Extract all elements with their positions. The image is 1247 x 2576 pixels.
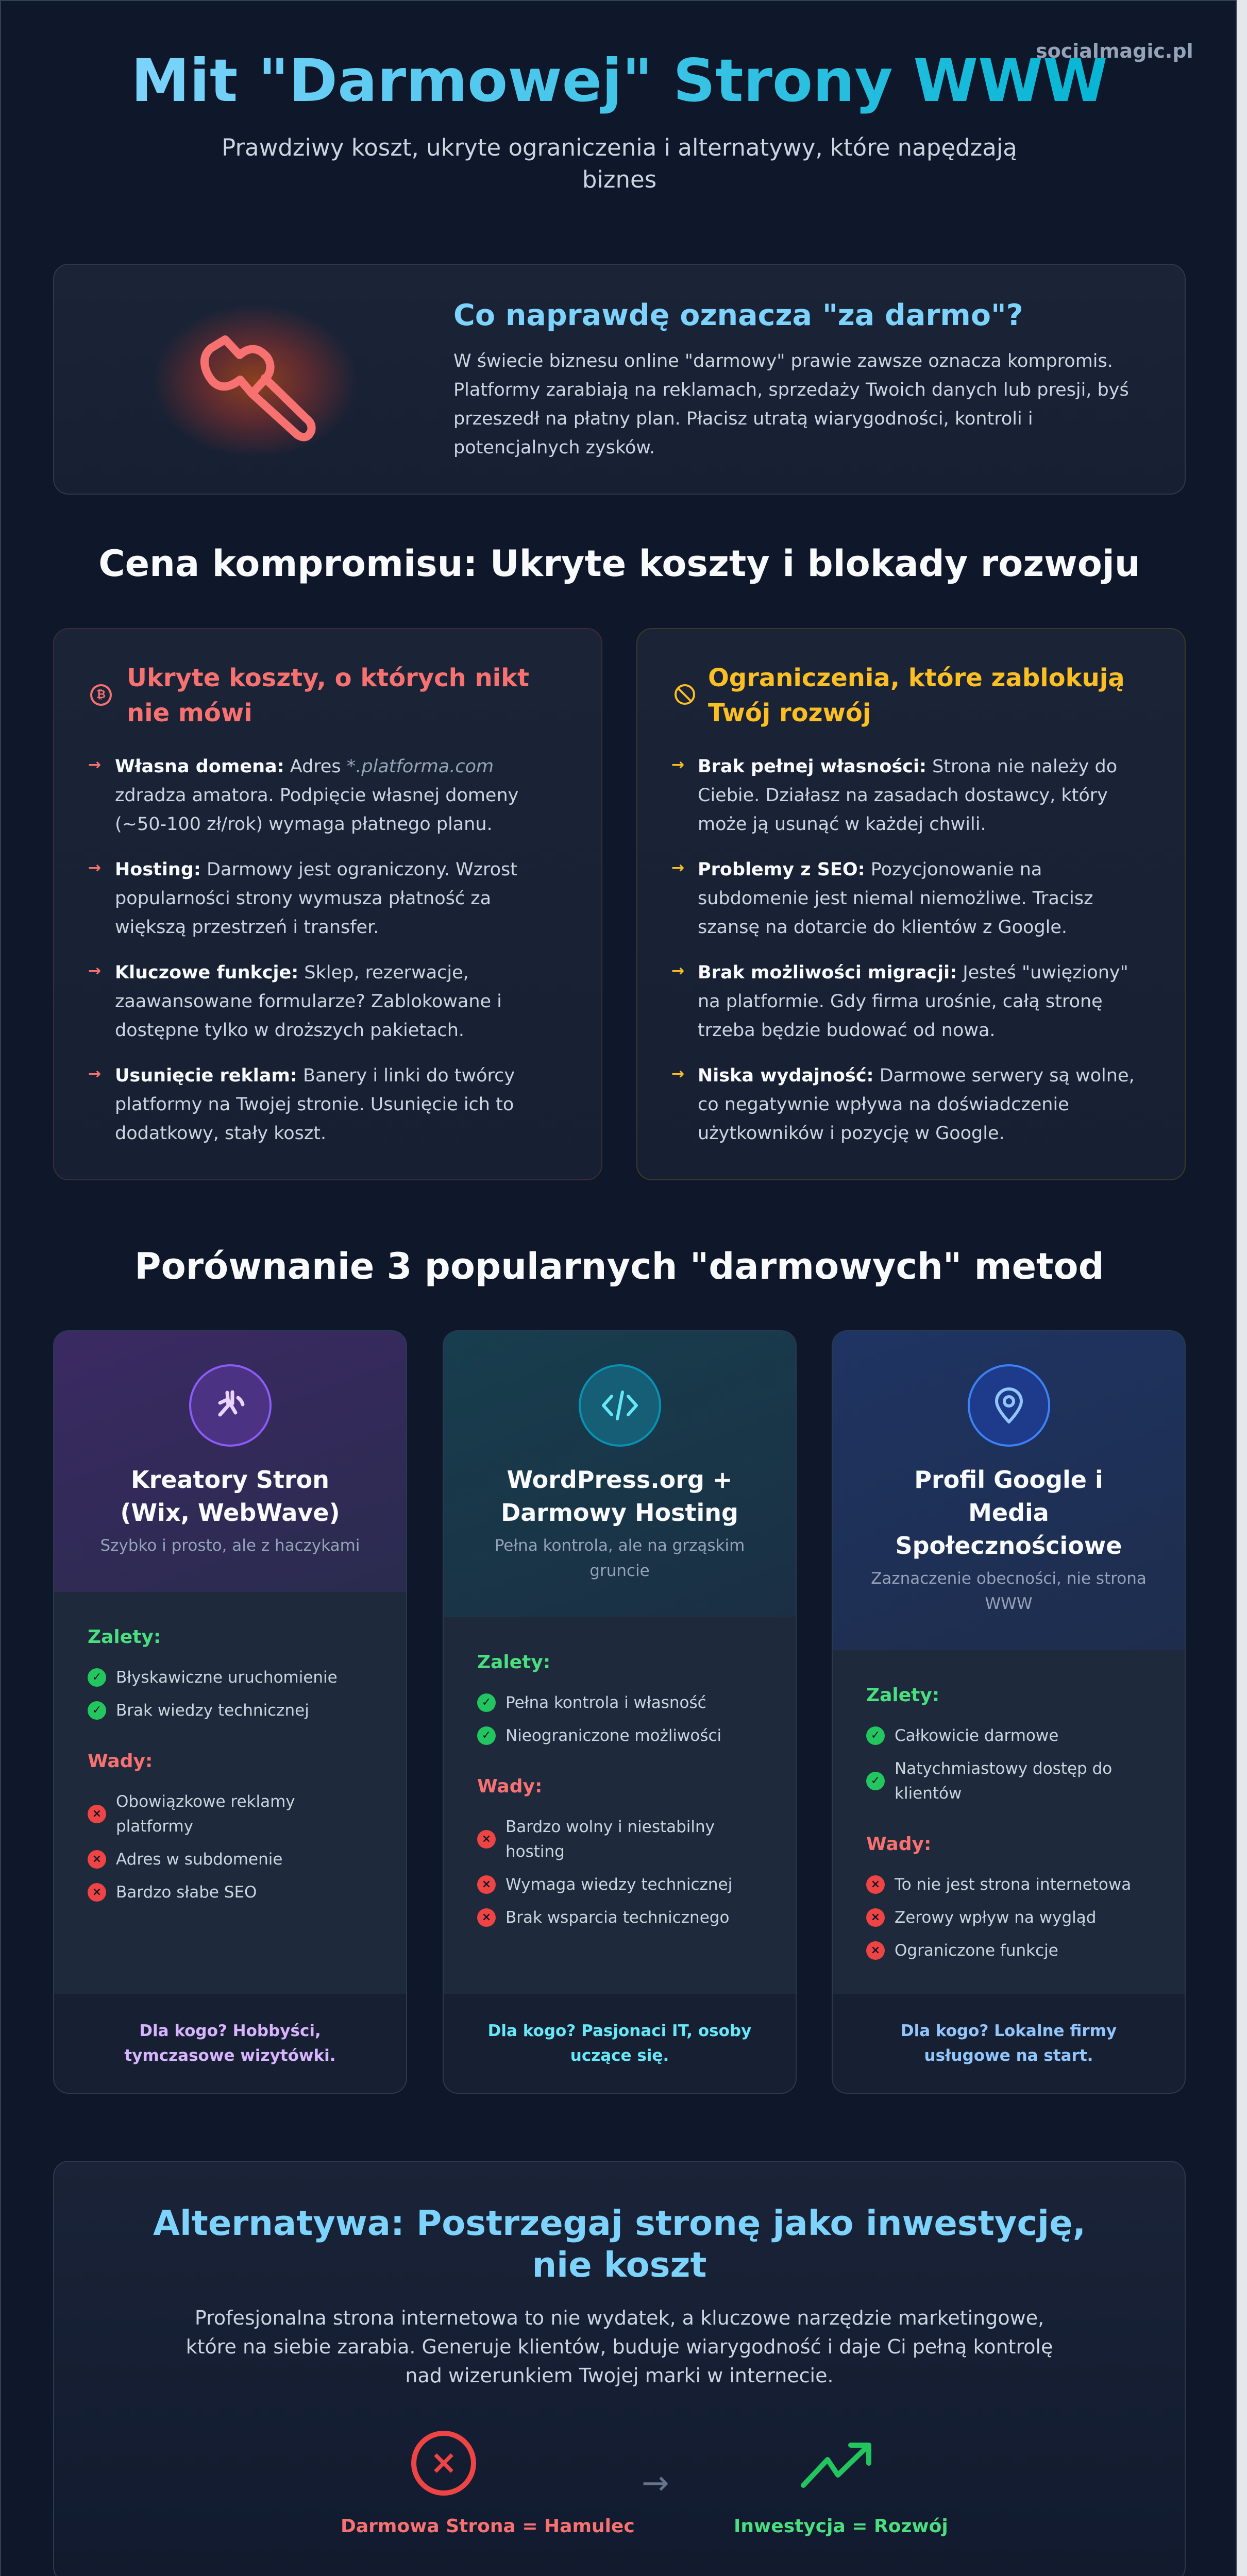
icon: wrench with glow (152, 304, 358, 459)
footer: usługowe na start. (924, 2046, 1093, 2065)
icon: code (578, 1364, 661, 1447)
list: Usunięcie reklam: Banery i linki do twórcy (115, 1065, 515, 1086)
list: → (671, 859, 684, 877)
list: → (671, 756, 684, 774)
list: Hosting: Darmowy jest ograniczony. Wzrost (115, 859, 517, 880)
panel: website builders: ✓ (92, 1704, 102, 1717)
label: free: Darmowa Strona = Hamulec (341, 2516, 635, 2537)
panel: website builders: Błyskawiczne uruchomienie (116, 1668, 338, 1687)
icon: coin: ₿ (96, 688, 106, 701)
panel: website builders: Obowiązkowe reklamy (116, 1792, 295, 1811)
panel: google profile: × (871, 1911, 880, 1924)
list (671, 756, 1135, 1144)
panel: wordpress: Darmowy Hosting (501, 1499, 738, 1527)
panel: google profile: Profil Google i (914, 1466, 1103, 1494)
list: → (88, 1065, 101, 1083)
list: Problemy z SEO: Pozycjonowanie na (698, 859, 1042, 880)
panel: wordpress: Nieograniczone możliwości (505, 1726, 721, 1745)
panel: website builders: Bardzo słabe SEO (116, 1883, 257, 1902)
panel: wordpress: × (482, 1878, 491, 1891)
list: co negatywnie wpływa na doświadczenie (698, 1094, 1069, 1115)
brand label: socialmagic.pl (1036, 40, 1193, 62)
panel: wordpress: Bardzo wolny i niestabilny (505, 1818, 715, 1836)
panel: website builders: × (92, 1886, 102, 1899)
panel: google profile: Media (968, 1499, 1049, 1527)
list: może ją usunąć w każdej chwili. (698, 814, 986, 835)
heading: nie koszt (532, 2245, 707, 2285)
list: Niska wydajność: Darmowe serwery są wolne, (698, 1065, 1135, 1086)
panel: website builders: Wady: (88, 1751, 153, 1772)
panel: google profile: Całkowicie darmowe (895, 1726, 1058, 1745)
panel: google profile: Zerowy wpływ na wygląd (895, 1908, 1096, 1927)
panel: website builders: × (92, 1807, 102, 1820)
footer: Dla kogo? Pasjonaci IT, osoby (488, 2022, 751, 2040)
text block (453, 351, 1129, 458)
panel: google profile: Społecznościowe (895, 1532, 1122, 1560)
text block: Profesjonalna strona internetowa to nie wydatek, a kluczowe narzędzie marketingowe, (195, 2307, 1044, 2329)
list: Ciebie. Działasz na zasadach dostawcy, który (698, 785, 1108, 806)
panel: website builders: Szybko i prosto, ale z haczykami (100, 1536, 360, 1555)
list: większą przestrzeń i transfer. (115, 917, 379, 938)
heading: section 3: Porównanie 3 popularnych "darmowych" metod (134, 1245, 1104, 1287)
list: dostępne tylko w droższych pakietach. (115, 1020, 464, 1041)
panel: website builders: ✓ (92, 1671, 102, 1684)
list: Kluczowe funkcje: Sklep, rezerwacje, (115, 962, 469, 983)
panel: google profile: WWW (985, 1595, 1032, 1613)
list: szansę na dotarcie do klientów z Google. (698, 917, 1067, 938)
heading: Co naprawdę oznacza "za darmo"? (453, 298, 1023, 332)
text block: Platformy zarabiają na reklamach, sprzedaży Twoich danych lub presji, byś (453, 380, 1129, 400)
heading (127, 664, 529, 727)
footer (833, 1994, 1185, 2093)
panel: google profile: klientów (895, 1784, 962, 1803)
panel: google profile: × (871, 1878, 880, 1891)
panel: intro (53, 264, 1186, 495)
panel: google profile: × (871, 1944, 880, 1957)
text block (186, 2307, 1053, 2387)
footer (54, 1994, 406, 2093)
panel: website builders: Zalety: (88, 1626, 161, 1648)
footer: uczące się. (570, 2046, 669, 2065)
panel: wordpress: × (482, 1911, 491, 1924)
icon: coin (90, 684, 112, 706)
panel: wordpress: × (482, 1833, 491, 1845)
subtitle (222, 134, 1017, 193)
panel: google profile: ✓ (871, 1774, 880, 1787)
list: (~50-100 zł/rok) wymaga płatnego planu. (115, 814, 493, 835)
panel: google profile: Zaznaczenie obecności, nie strona (871, 1569, 1147, 1588)
panel: wordpress: Pełna kontrola, ale na grząskim (495, 1536, 745, 1555)
list: → (88, 756, 101, 774)
panel: hidden costs (53, 628, 602, 1180)
panel: website builders: Brak wiedzy technicznej (116, 1701, 309, 1720)
heading: Alternatywa: Postrzegaj stronę jako inwestycję, (153, 2203, 1086, 2243)
text block: W świecie biznesu online "darmowy" prawie zawsze oznacza kompromis. (453, 351, 1113, 371)
text block: nad wizerunkiem Twojej marki w internecie. (405, 2364, 834, 2387)
footer (444, 1994, 796, 2093)
panel: wordpress: Zalety: (477, 1652, 550, 1673)
heading (153, 2203, 1086, 2285)
list: → (88, 962, 101, 980)
list: popularności strony wymusza płatność za (115, 888, 491, 909)
panel: wordpress: Wady: (477, 1776, 542, 1797)
panel: wordpress: Brak wsparcia technicznego (505, 1908, 729, 1927)
text block: potencjalnych zysków. (453, 437, 655, 458)
heading: section 2: Cena kompromisu: Ukryte koszty i blokady rozwoju (98, 543, 1140, 585)
panel: google profile: To nie jest strona internetowa (895, 1875, 1131, 1894)
panel: website builders: (Wix, WebWave) (120, 1499, 340, 1527)
panel: wordpress: Wymaga wiedzy technicznej (505, 1875, 732, 1894)
list: Brak możliwości migracji: Jesteś "uwięziony" (698, 962, 1128, 983)
panel: website builders: × (92, 1853, 102, 1866)
arrow: → (642, 2464, 669, 2502)
list: Własna domena: Adres *.platforma.com (115, 756, 494, 777)
subtitle: biznes (582, 166, 656, 193)
list: → (88, 859, 101, 877)
list (88, 756, 518, 1144)
heading: Ukryte koszty, o których nikt (127, 664, 529, 692)
icon: builder (189, 1364, 271, 1447)
text block: które na siebie zarabia. Generuje klientów, buduje wiarygodność i daje Ci pełną kontrolę (186, 2335, 1053, 2358)
list: subdomenie jest niemal niemożliwe. Tracisz (698, 888, 1093, 909)
panel: website builders: Kreatory Stron (131, 1466, 329, 1494)
heading (708, 664, 1125, 727)
panel: limitations (636, 628, 1186, 1180)
list: użytkowników i pozycję w Google. (698, 1123, 1005, 1144)
panel: google profile: Natychmiastowy dostęp do (895, 1759, 1112, 1778)
text block: przeszedł na płatny plan. Płacisz utratą wiarygodności, kontroli i (453, 409, 1033, 429)
icon: x circle: × (430, 2444, 458, 2482)
panel: wordpress: ✓ (482, 1696, 491, 1709)
panel: google profile: Ograniczone funkcje (895, 1941, 1058, 1960)
subtitle: Prawdziwy koszt, ukryte ograniczenia i alternatywy, które napędzają (222, 134, 1017, 161)
panel: wordpress: gruncie (589, 1562, 650, 1580)
icon: blocked (675, 684, 695, 705)
title: Mit "Darmowej" Strony WWW (131, 46, 1108, 115)
footer: Dla kogo? Hobbyści, (139, 2022, 321, 2040)
panel: website builders: platformy (116, 1817, 193, 1836)
icon: trend up (801, 2443, 871, 2488)
footer: tymczasowe wizytówki. (124, 2046, 336, 2065)
panel: wordpress: hosting (505, 1842, 565, 1861)
list: → (671, 962, 684, 980)
list: Brak pełnej własności: Strona nie należy do (698, 756, 1117, 777)
panel: google profile: Zalety: (866, 1685, 939, 1706)
panel: google profile: Wady: (866, 1834, 931, 1855)
panel: wordpress (443, 1330, 797, 2094)
panel: wordpress: WordPress.org + (507, 1466, 732, 1494)
panel: website builders (53, 1330, 407, 2094)
panel: google profile (832, 1330, 1186, 2094)
footer: Dla kogo? Lokalne firmy (901, 2022, 1117, 2040)
panel: google profile: ✓ (871, 1729, 880, 1742)
list: na platformie. Gdy firma urośnie, całą stronę (698, 991, 1103, 1012)
label: invest: Inwestycja = Rozwój (734, 2516, 948, 2537)
list: trzeba będzie budować od nowa. (698, 1020, 996, 1041)
panel: website builders: Adres w subdomenie (116, 1850, 282, 1869)
panel: wordpress: Pełna kontrola i własność (505, 1693, 706, 1712)
heading: Ograniczenia, które zablokują (708, 664, 1125, 692)
heading: Twój rozwój (708, 699, 871, 727)
icon: x circle (411, 2431, 476, 2496)
list: platformy na Twojej stronie. Usunięcie ich to (115, 1094, 514, 1115)
list: → (671, 1065, 684, 1083)
heading: nie mówi (127, 699, 252, 727)
list: dodatkowy, stały koszt. (115, 1123, 326, 1144)
panel: wordpress: ✓ (482, 1729, 491, 1742)
icon: map pin (968, 1364, 1050, 1447)
list: zdradza amatora. Podpięcie własnej domeny (115, 785, 518, 806)
panel: alternative (53, 2161, 1186, 2576)
list: zaawansowane formularze? Zablokowane i (115, 991, 502, 1012)
